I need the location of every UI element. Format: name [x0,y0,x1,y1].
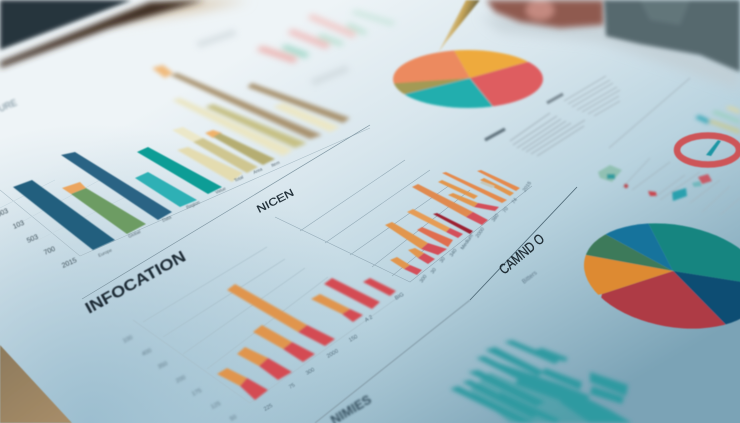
x axis labels: Region [185,199,201,210]
y axis labels: 125 [210,401,222,411]
x axis labels: Europe [97,247,113,258]
x axis labels: 225 [263,403,274,413]
y axis labels: 103 [12,220,26,231]
pen [438,0,480,53]
x axis labels: Item [270,160,281,168]
x axis labels: Area [252,166,264,175]
chart axis [0,128,370,256]
x axis labels: Total [233,174,244,183]
x axis labels: 30 [439,256,447,264]
bar chart: middle [275,160,533,284]
bars [385,170,520,275]
y axis labels: 400 [141,348,153,358]
x axis labels: 2015 [522,180,533,193]
bar chart: bottom [122,247,405,423]
sleeve [604,0,740,72]
x axis labels: 2000 [475,226,486,239]
text block: right [564,76,620,116]
x axis labels: 300 [419,274,429,284]
donut center marker [706,140,721,156]
x axis labels: Data [161,214,173,223]
x axis labels: Medium [460,233,475,251]
teal blurred table [450,340,632,423]
x axis labels: 340 [449,248,459,258]
y axis labels: 350 [157,361,169,371]
caption: under heading: Bitters [522,270,539,286]
small divider top right [609,78,690,148]
blurred top mini bar chart [256,10,396,63]
pie chart: top [392,48,544,110]
small charts lower right [598,158,740,215]
y axis labels: 50 [229,414,238,423]
small bars top right [695,106,740,134]
y axis labels: 2015 [61,257,78,270]
x axis labels: 70 [502,206,510,214]
back bars [152,65,350,156]
blurred top captions [196,29,350,86]
heading: INFOCATION: INFOCATION [83,248,189,317]
heading: CAMIID O: CAMND O [496,230,547,277]
y axis labels: 503 [26,234,40,245]
x axis labels: 300 [305,367,316,377]
y axis labels [122,335,238,423]
hand [486,0,604,28]
shadow of hand [480,15,740,90]
y axis labels: 200 [175,375,187,385]
y axis labels: 100 [122,335,134,345]
x axis labels: 30 [430,267,438,275]
grid lines [133,247,400,403]
x axis labels: Value [214,186,227,195]
y axis labels: 175 [191,388,203,398]
x axis labels: BIG [394,292,405,302]
heading: NICEN: NICEN [255,187,296,216]
x axis labels: 75 [288,382,296,391]
x axis labels [263,292,405,413]
x axis labels: 2000 [326,348,340,360]
x axis labels: 150 [348,334,359,344]
pie chart: bottom right [583,222,740,330]
donut chart [677,136,739,164]
x axis labels: Global [127,229,141,239]
grid lines [275,160,532,282]
text blocks near pie [485,76,620,156]
divider lines [82,125,577,423]
middle bars [172,127,275,182]
text block: left [510,113,585,156]
y axis labels: 700 [43,246,57,257]
x axis labels [97,160,281,258]
front bars [13,147,222,250]
y axis labels [0,208,78,270]
x axis labels: A 2 [364,315,374,324]
x axis labels: 360 [491,213,501,223]
table and laptop in top-left corner [0,0,250,68]
bars [217,278,396,400]
x axis labels: 74 [511,197,519,205]
wooden table corner [0,345,72,423]
x axis labels [419,180,533,284]
bar chart: top left [0,65,370,270]
